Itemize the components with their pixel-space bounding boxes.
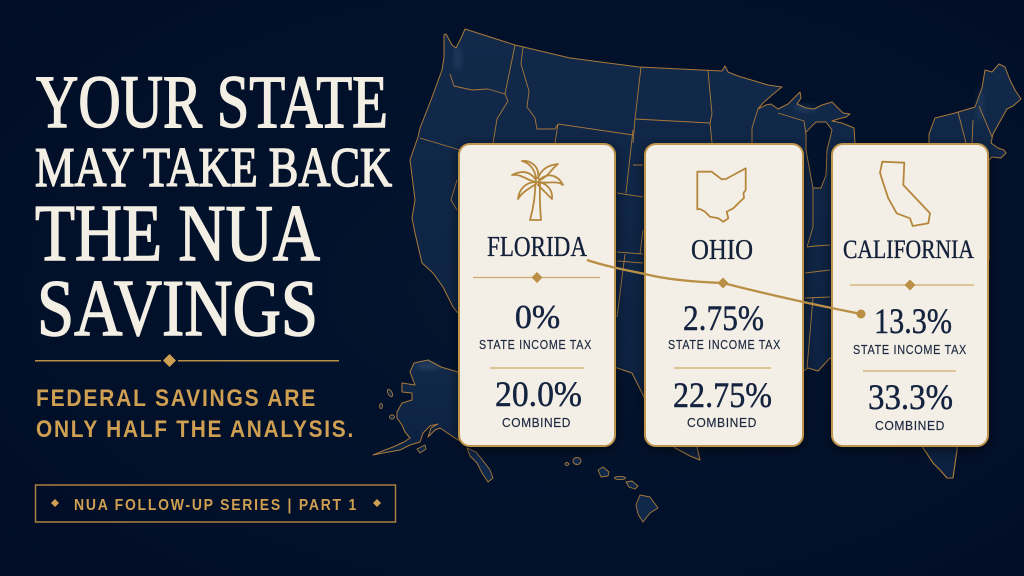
combined rate: Florida: 20.0%	[495, 374, 582, 414]
combined rate: Ohio	[673, 375, 772, 430]
combined rate: California	[868, 377, 953, 433]
divider	[473, 272, 600, 283]
combined rate: California: 33.3%	[868, 377, 953, 417]
state rate: California: 13.3%	[874, 301, 952, 341]
Great Lakes	[806, 122, 832, 188]
title: THE NUA	[35, 190, 320, 278]
icon: palm tree	[512, 161, 563, 220]
subtitle	[36, 385, 355, 443]
state rate: Florida: STATE INCOME TAX	[479, 338, 592, 352]
subtitle: ONLY HALF THE ANALYSIS.	[36, 416, 355, 443]
series badge	[36, 485, 396, 522]
panel: California	[832, 144, 988, 446]
subtitle: FEDERAL SAVINGS ARE	[36, 385, 317, 412]
state rate: California	[853, 301, 967, 357]
state rate: Ohio	[668, 298, 781, 352]
Florida peninsula highlight	[923, 448, 957, 478]
state name: Florida: FLORIDA	[487, 232, 588, 263]
title: YOUR STATE	[36, 61, 388, 144]
combined rate: Ohio: 22.75%	[673, 375, 772, 415]
divider	[850, 280, 974, 290]
combined rate: Florida	[495, 374, 582, 430]
state rate: Ohio: 2.75%	[683, 298, 764, 338]
state name: Ohio: OHIO	[691, 235, 753, 266]
Hawaii	[565, 458, 658, 522]
map of the United States	[373, 29, 1021, 522]
combined rate: California: COMBINED	[875, 419, 945, 433]
panel: Florida	[459, 144, 615, 446]
title: MAY TAKE BACK	[35, 137, 392, 199]
icon: Ohio outline	[697, 168, 746, 222]
connecting trend line	[587, 260, 866, 318]
state rate: Ohio: STATE INCOME TAX	[668, 338, 781, 352]
title: SAVINGS	[37, 263, 318, 353]
series badge: NUA FOLLOW-UP SERIES | PART 1	[74, 497, 358, 514]
state name: California: CALIFORNIA	[843, 235, 974, 264]
state rate: Florida	[479, 299, 592, 352]
panel: Ohio	[645, 144, 803, 446]
state rate: Florida: 0%	[515, 299, 560, 336]
state borders	[420, 45, 992, 368]
mainland	[410, 29, 1021, 478]
title divider	[35, 354, 339, 367]
title	[35, 61, 392, 353]
icon: California outline	[880, 162, 930, 226]
state rate: California: STATE INCOME TAX	[853, 343, 967, 357]
Alaska	[373, 360, 493, 482]
combined rate: Florida: COMBINED	[502, 416, 571, 430]
combined rate: Ohio: COMBINED	[687, 416, 757, 430]
